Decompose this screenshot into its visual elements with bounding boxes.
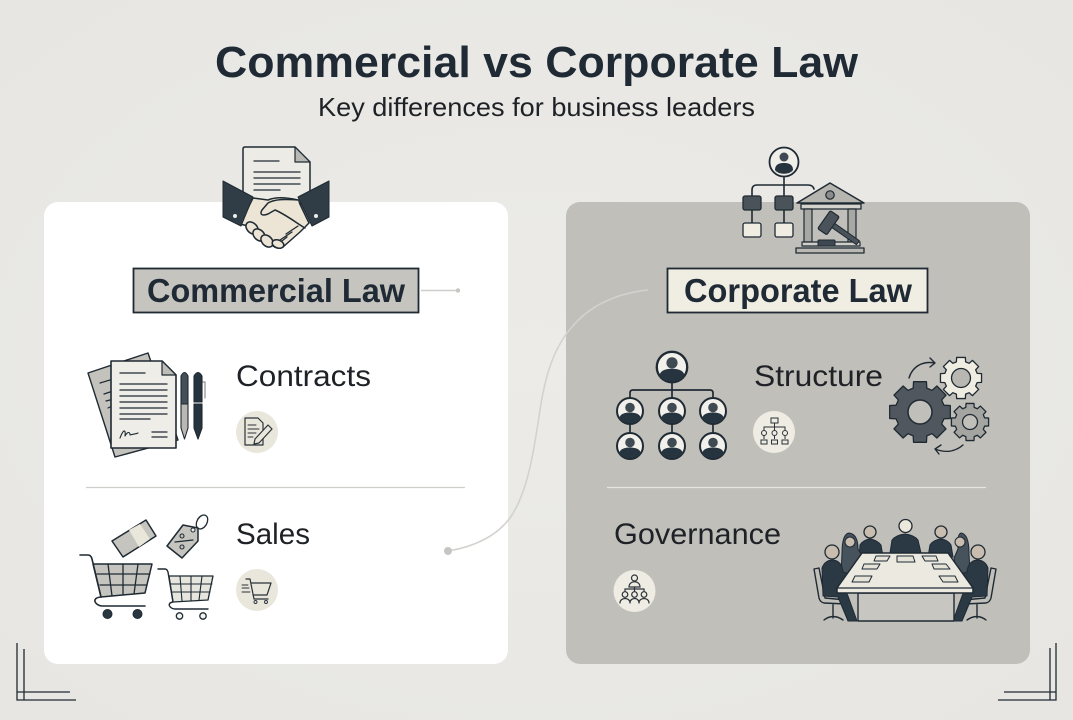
icon: contract papers and pens bbox=[88, 353, 205, 457]
panel: commercial law bbox=[44, 202, 508, 664]
corner marks: bottom left bbox=[17, 643, 76, 700]
label: corporate law: Corporate Law bbox=[684, 272, 912, 309]
icon: governance badge bbox=[614, 570, 656, 612]
heading: contracts: Contracts bbox=[236, 360, 371, 393]
connector curve between panels bbox=[444, 290, 648, 555]
subtitle: Key differences for business leaders bbox=[318, 92, 755, 122]
icon: organisation chart of people bbox=[617, 352, 726, 459]
corner marks: bottom right bbox=[998, 643, 1056, 700]
panel: corporate law bbox=[566, 202, 1030, 664]
heading: structure: Structure bbox=[754, 360, 883, 393]
icon: structure badge bbox=[753, 411, 795, 453]
heading: sales: Sales bbox=[236, 518, 310, 551]
heading: governance: Governance bbox=[614, 518, 781, 551]
icon: shopping carts, card and price tag bbox=[80, 513, 213, 619]
icon: gears with arrows bbox=[890, 357, 989, 454]
title: Commercial vs Corporate Law bbox=[215, 38, 859, 87]
icon: contract badge bbox=[236, 411, 278, 453]
connector stub from commercial law label bbox=[421, 288, 460, 293]
icon: cart badge bbox=[236, 569, 278, 611]
icon: boardroom meeting bbox=[814, 520, 996, 621]
icon: handshake with document bbox=[223, 147, 329, 250]
divider: corporate panel bbox=[607, 486, 986, 488]
label: commercial law: Commercial Law bbox=[147, 272, 405, 309]
divider: commercial panel bbox=[86, 486, 465, 488]
icon: org chart with courthouse bbox=[743, 148, 864, 253]
